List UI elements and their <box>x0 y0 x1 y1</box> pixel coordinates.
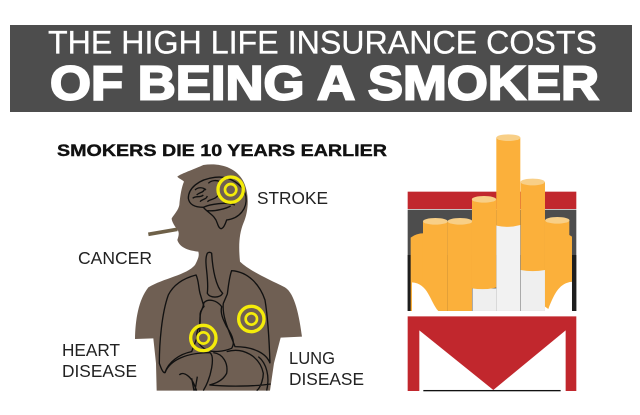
icon: cigarette in mouth <box>148 229 177 234</box>
trachea <box>206 252 223 297</box>
right lung <box>223 271 270 363</box>
subheading: SMOKERS DIE 10 YEARS EARLIER <box>57 141 387 160</box>
cigarette 7 <box>545 217 572 309</box>
cigarette 4 <box>472 196 496 311</box>
body silhouette <box>135 164 302 391</box>
label: lung disease: DISEASE <box>289 369 364 389</box>
right paper gap <box>545 282 572 311</box>
label: heart disease <box>62 340 137 381</box>
pack interior <box>408 210 576 311</box>
target: heart <box>191 325 216 351</box>
abdominal organs <box>165 350 271 391</box>
cigarette far left <box>411 233 425 311</box>
pack bottom line <box>423 390 561 391</box>
target: lung <box>239 306 264 332</box>
pack front flap <box>408 316 576 391</box>
cigarette 2 <box>423 218 448 311</box>
left paper gap <box>412 282 438 311</box>
brain <box>188 177 246 229</box>
cigarette 5 tallest <box>496 134 520 311</box>
title line 2: OF BEING A SMOKER <box>50 58 599 110</box>
label: cancer: CANCER <box>78 248 152 268</box>
label: stroke: STROKE <box>257 188 328 208</box>
target: brain <box>218 177 243 202</box>
left lung <box>159 275 204 373</box>
heart <box>197 300 233 352</box>
title line 1: THE HIGH LIFE INSURANCE COSTS <box>48 24 597 60</box>
organ outlines <box>159 177 271 391</box>
label: heart disease: DISEASE <box>62 361 137 381</box>
anatomy figure <box>135 164 302 391</box>
label: heart disease: HEART <box>62 340 120 360</box>
title banner <box>10 24 632 112</box>
cigarette pack <box>408 134 576 391</box>
pack back top band <box>408 192 576 209</box>
label: lung disease <box>289 348 364 389</box>
cigarette 6 <box>520 179 545 311</box>
label: lung disease: LUNG <box>289 348 335 368</box>
cigarette 3 <box>448 218 472 311</box>
